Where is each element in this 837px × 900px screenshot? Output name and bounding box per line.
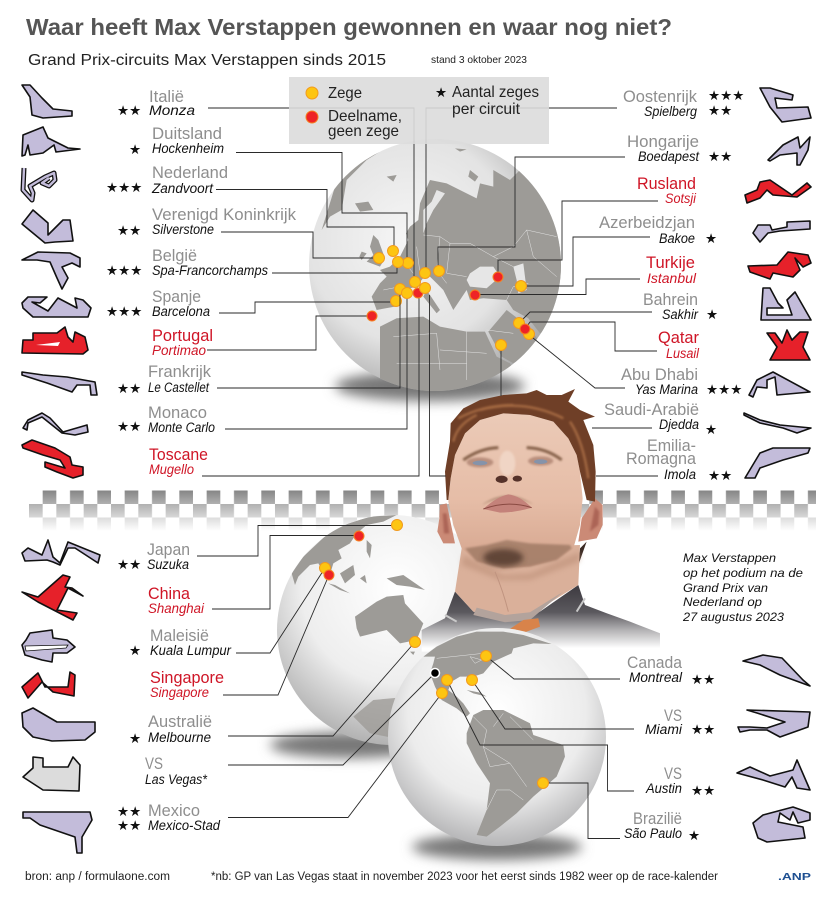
circuit: Singapore: Singapore	[150, 669, 224, 687]
circuit: Verenigd Koninkrijk Silverstone: Verenigd Koninkrijk	[152, 206, 297, 224]
circuit: Frankrijk Le Castellet	[22, 284, 406, 397]
circuit: China Shanghai	[22, 531, 364, 620]
circuit: Bahrein Sakhir: ★	[706, 307, 718, 323]
circuit: Singapore: Singapore	[150, 685, 209, 700]
shirt	[422, 585, 660, 652]
moustache stubble	[482, 496, 533, 505]
chin shadow	[483, 549, 523, 566]
circuit: Brazilië São Paulo: Brazilië	[633, 810, 682, 828]
circuit: Duitsland Hockenheim	[22, 125, 414, 268]
circuit: Portugal Portimao: Portugal	[152, 327, 213, 345]
circuit: Abu Dhabi Yas Marina: ★★★	[706, 382, 742, 398]
lips	[483, 494, 532, 513]
eyes	[473, 461, 487, 465]
circuit: Mexico Mexico-Stad: Mexico-Stad	[148, 818, 220, 833]
circuit: China Shanghai: Shanghai	[148, 601, 205, 616]
circuit: Canada Montreal: Canada	[627, 654, 683, 672]
circuit: Nederland Zandvoort: ★★★	[106, 180, 142, 196]
circuit: Qatar Lusail: Lusail	[666, 346, 700, 361]
circuit: Nederland Zandvoort	[23, 164, 398, 256]
ears	[437, 498, 603, 543]
circuit: Bahrein Sakhir: Bahrein	[643, 291, 698, 309]
circuit: Brazilië São Paulo: São Paulo	[624, 826, 682, 841]
circuit: Abu Dhabi Yas Marina: Abu Dhabi	[621, 366, 698, 384]
circuit: Portugal Portimao: Portimao	[152, 343, 206, 358]
circuit: VS Austin	[442, 674, 810, 799]
circuit: Mexico Mexico-Stad: ★★	[117, 804, 141, 820]
circuit: Saudi-Arabië Djedda: ★	[705, 422, 717, 438]
circuit: Toscane Mugello: Mugello	[149, 462, 194, 477]
circuit: Brazilië São Paulo: ★	[688, 828, 700, 844]
circuit: Australië Melbourne: Melbourne	[148, 730, 211, 745]
circuit: Australië Melbourne: Australië	[148, 713, 212, 731]
face	[448, 413, 583, 568]
collar lettering	[445, 598, 585, 622]
circuit: Verenigd Koninkrijk Silverstone	[22, 206, 384, 264]
circuit: Japan Suzuka	[22, 520, 402, 573]
photo caption: 27 augustus 2023	[682, 610, 784, 624]
circuit: Hongarije Boedapest: ★★	[708, 149, 732, 165]
circuit: Duitsland Hockenheim: ★	[129, 142, 141, 158]
circuit: Spanje Barcelona: Barcelona	[152, 304, 210, 319]
circuit: Emilia-Romagna Imola: Emilia-	[647, 437, 696, 455]
circuit: Azerbeidzjan Bakoe	[516, 214, 810, 292]
circuit: Oostenrijk Spielberg: Oostenrijk	[623, 88, 698, 106]
circuit: Azerbeidzjan Bakoe: Bakoe	[659, 231, 695, 246]
date note: stand 3 oktober 2023	[431, 54, 527, 66]
circuit: België Spa-Francorchamps: ★★★	[106, 263, 142, 279]
ear shading	[443, 507, 599, 533]
circuit: Toscane Mugello	[22, 288, 423, 478]
circuit: Japan Suzuka: Suzuka	[147, 557, 189, 572]
globe: Asia and Australia	[264, 515, 462, 767]
circuit: Italië Monza: Monza	[149, 103, 196, 118]
nostrils	[496, 476, 508, 483]
circuit: Rusland Sotsji: Rusland	[637, 175, 696, 193]
circuit: Frankrijk Le Castellet: Le Castellet	[148, 380, 210, 395]
dark collar edge	[578, 542, 587, 565]
circuit: VS Miami: ★★	[691, 722, 715, 738]
circuit: Rusland Sotsji: Sotsji	[665, 191, 697, 206]
circuit: Canada Montreal: ★★	[691, 672, 715, 688]
circuit: Oostenrijk Spielberg: Spielberg	[644, 104, 697, 119]
circuit: Abu Dhabi Yas Marina	[533, 338, 810, 398]
circuit: België Spa-Francorchamps	[22, 247, 404, 289]
legend: win label: Zege	[328, 85, 362, 102]
circuit: Verenigd Koninkrijk Silverstone: ★★	[117, 223, 141, 239]
legend: win dot	[306, 87, 318, 99]
circuit: Portugal Portimao	[22, 311, 377, 358]
circuit: België Spa-Francorchamps: België	[152, 247, 197, 265]
circuit: VS Austin: Austin	[645, 781, 682, 796]
circuit: Verenigd Koninkrijk Silverstone: Silverstone	[152, 222, 214, 237]
legend: star label: per circuit	[452, 101, 521, 118]
circuit: Hongarije Boedapest	[434, 133, 810, 276]
legend: star label: Aantal zeges	[452, 84, 539, 101]
circuit: VS Austin: ★★	[691, 783, 715, 799]
circuit: VS Las Vegas	[23, 668, 440, 791]
beard	[465, 540, 572, 568]
circuit: Maleisië Kuala Lumpur	[22, 562, 330, 662]
globe: Europe, Middle East and Africa	[309, 139, 567, 401]
circuit: Saudi-Arabië Djedda: Saudi-Arabië	[604, 401, 699, 419]
circuit: VS Miami: Miami	[645, 722, 683, 737]
circuit: VS Austin: VS	[664, 765, 682, 783]
circuit: VS Miami: VS	[664, 707, 682, 725]
circuit: Duitsland Hockenheim: Duitsland	[152, 125, 222, 143]
Red Bull emblem	[508, 618, 540, 632]
circuit: Oostenrijk Spielberg	[420, 88, 811, 278]
circuit: Canada Montreal: Montreal	[629, 670, 683, 685]
circuit: België Spa-Francorchamps: Spa-Francorchamps	[152, 263, 268, 278]
footnote: *nb: GP van Las Vegas staat in november 2023 voor het eerst sinds 1982 weer op de race-kalender	[211, 871, 718, 883]
circuit: Frankrijk Le Castellet: Frankrijk	[148, 363, 212, 381]
circuit: Japan Suzuka: ★★	[117, 557, 141, 573]
circuit: Australië Melbourne: ★	[129, 731, 141, 747]
circuit: Saudi-Arabië Djedda	[496, 340, 811, 438]
circuit: Toscane Mugello: Toscane	[149, 446, 208, 464]
legend: star: ★	[435, 85, 447, 101]
circuit: Italië Monza	[22, 85, 420, 288]
circuit: Spanje Barcelona: Spanje	[152, 288, 201, 306]
circuit: Nederland Zandvoort: Zandvoort	[151, 181, 214, 196]
circuit: VS Las Vegas: VS	[145, 755, 163, 773]
photo caption: Nederland op	[683, 595, 762, 609]
circuit: VS Miami	[466, 674, 810, 738]
circuit: Azerbeidzjan Bakoe: Azerbeidzjan	[599, 214, 695, 232]
circuit: Qatar Lusail	[520, 322, 810, 361]
circuit: Spanje Barcelona: ★★★	[106, 304, 142, 320]
circuit: Brazilië São Paulo	[538, 778, 810, 844]
circuit: Azerbeidzjan Bakoe: ★	[705, 231, 717, 247]
circuit: Mexico Mexico-Stad: ★★	[117, 818, 141, 834]
legend: no-win label: Deelname,	[328, 108, 402, 125]
circuit: Nederland Zandvoort: Nederland	[152, 164, 228, 182]
legend: no-win label: geen zege	[328, 123, 399, 140]
circuit: Qatar Lusail: Qatar	[658, 329, 699, 347]
circuit: Abu Dhabi Yas Marina: Yas Marina	[635, 382, 698, 397]
circuit: Hongarije Boedapest: Boedapest	[638, 149, 700, 164]
jaw shadow	[462, 552, 580, 580]
circuit: Italië Monza: Italië	[149, 88, 184, 106]
title: Waar heeft Max Verstappen gewonnen en waar nog niet?	[26, 14, 672, 40]
neck	[455, 545, 580, 618]
circuit: Turkije Istanbul: Istanbul	[647, 271, 697, 286]
hair	[445, 389, 596, 502]
photo: Max Verstappen	[422, 389, 660, 652]
circuit: Australië Melbourne	[22, 636, 420, 747]
neck bottom shade	[473, 592, 563, 622]
eyebrows	[463, 448, 562, 460]
circuit: Rusland Sotsji	[493, 175, 811, 282]
nose	[499, 451, 515, 476]
photo caption: op het podium na de	[683, 566, 803, 580]
circuit: Singapore	[22, 570, 334, 700]
circuit: Hongarije Boedapest: Hongarije	[627, 133, 699, 151]
circuit: Duitsland Hockenheim: Hockenheim	[152, 141, 224, 156]
circuit: Mexico Mexico-Stad	[23, 688, 448, 853]
circuit: Monaco Monte Carlo: Monte Carlo	[148, 420, 215, 435]
circuit: Mexico Mexico-Stad: Mexico	[148, 802, 200, 820]
circuit: Canada Montreal	[480, 650, 810, 688]
circuit: Bahrein Sakhir: Sakhir	[662, 307, 698, 322]
circuit: Bahrein Sakhir	[514, 288, 811, 328]
eye sockets	[467, 457, 493, 467]
circuit: Maleisië Kuala Lumpur: Kuala Lumpur	[150, 643, 231, 658]
circuit: Japan Suzuka: Japan	[147, 541, 190, 559]
hair highlights	[453, 405, 588, 478]
circuit: Maleisië Kuala Lumpur: ★	[129, 643, 141, 659]
photo caption: Max Verstappen	[683, 551, 776, 565]
circuit: Oostenrijk Spielberg: ★★	[708, 103, 732, 119]
circuit: Emilia-Romagna Imola: Romagna	[626, 450, 697, 468]
circuit: Emilia-Romagna Imola: Imola	[664, 467, 696, 482]
circuit: Emilia-Romagna Imola	[420, 282, 810, 484]
source: bron: anp / formulaone.com	[25, 871, 170, 883]
circuit: Italië Monza: ★★	[117, 103, 141, 119]
circuit: Monaco Monte Carlo: Monaco	[148, 404, 207, 422]
circuit: Frankrijk Le Castellet: ★★	[117, 381, 141, 397]
circuit: Turkije Istanbul	[470, 252, 811, 300]
circuit: Monaco Monte Carlo	[23, 288, 412, 435]
legend	[289, 77, 549, 144]
circuit: Spanje Barcelona	[22, 288, 402, 320]
circuit: VS Las Vegas: Las Vegas*	[145, 772, 208, 787]
circuit: Oostenrijk Spielberg: ★★★	[708, 88, 744, 104]
checkered band	[29, 490, 816, 531]
circuit: Turkije Istanbul: Turkije	[646, 254, 695, 272]
circuit: Maleisië Kuala Lumpur: Maleisië	[150, 627, 209, 645]
lip line	[483, 504, 532, 509]
circuit: Emilia-Romagna Imola: ★★	[708, 468, 732, 484]
ANP logo: .ANP	[778, 872, 811, 883]
globe: the Americas	[388, 628, 606, 860]
circuit: China Shanghai: China	[148, 585, 191, 603]
legend: no-win dot	[306, 111, 318, 123]
circuit: Monaco Monte Carlo: ★★	[117, 419, 141, 435]
circuit: Saudi-Arabië Djedda: Djedda	[659, 417, 699, 432]
neck crease	[495, 572, 508, 612]
photo caption: Grand Prix van	[683, 581, 768, 595]
subtitle: Grand Prix-circuits Max Verstappen sinds 2015	[28, 52, 386, 69]
